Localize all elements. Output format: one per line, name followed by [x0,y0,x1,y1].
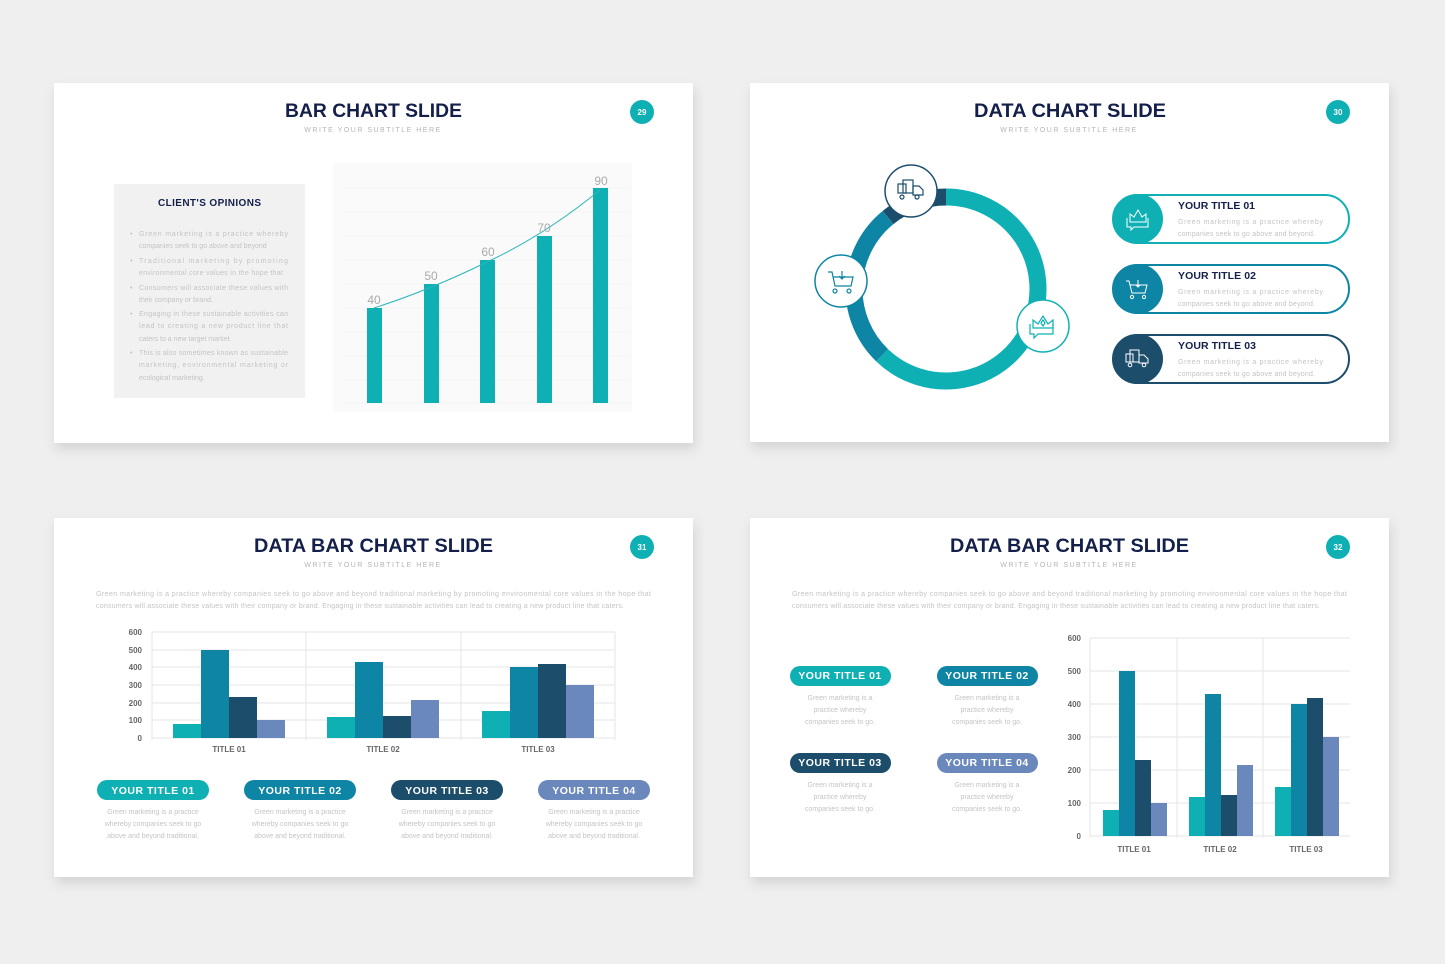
text block: client's opinions: • [130,311,133,318]
item: your title 03 [1113,334,1349,384]
labels grid: companies seek to go. [952,719,1022,726]
labels row: YOUR TITLE 02 [258,785,342,797]
grouped bar chart: TITLE 03 [1289,845,1323,854]
labels grid: Green marketing is a [955,695,1020,702]
text block: client's opinions: Engaging in these sustainable activities can [139,311,288,318]
intro paragraph: consumers will associate these values with their company or brand. Engaging in these sustainable activities can lead to creating a new product line that caters. [96,603,624,610]
text block: client's opinions: lead to creating a new product line that [139,323,288,330]
page number badge: 32 [1334,543,1343,552]
item: your title 02: YOUR TITLE 02 [1178,270,1256,282]
panel: data bar chart slide 31: above and beyond traditional. [401,833,493,840]
item: your title 02: Green marketing is a practice whereby [1178,289,1324,296]
bar chart: growth: 60 [481,245,495,259]
labels grid: companies seek to go. [952,806,1022,813]
panel: data chart slide [750,83,1389,442]
labels row: YOUR TITLE 03 [405,785,489,797]
icon: crown [1017,300,1069,352]
item: your title 01: companies seek to go above and beyond. [1178,231,1315,238]
panel: data bar chart slide 31: Green marketing is a practice [254,809,346,816]
item: your title 01: Green marketing is a practice whereby [1178,219,1324,226]
page number badge [1326,100,1350,124]
panel: data bar chart slide 31: whereby companies seek to go [251,821,348,828]
title: DATA CHART SLIDE [974,101,1166,122]
intro paragraph: Green marketing is a practice whereby companies seek to go above and beyond traditional marketing by promoting environmental core values in the hope that [96,591,651,598]
item: your title 03: companies seek to go above and beyond. [1178,371,1315,378]
grouped bar chart [129,628,615,754]
labels grid: companies seek to go. [805,719,875,726]
text block: client's opinions: environmental core values in the hope that [139,270,283,277]
grouped bar chart: TITLE 01 [1117,845,1151,854]
labels grid: practice whereby [961,707,1014,714]
bar chart: growth: 70 [537,221,551,235]
donut chart [854,197,1038,381]
grouped bar chart: 300 [1068,733,1082,742]
title: DATA BAR CHART SLIDE [254,536,493,557]
labels grid: Green marketing is a [808,695,873,702]
grouped bar chart: 500 [1068,667,1082,676]
bar chart: growth: 50 [424,269,438,283]
item: your title 01: YOUR TITLE 01 [1178,200,1255,212]
text block: client's opinions [114,184,305,398]
labels grid: YOUR TITLE 02 [945,670,1029,682]
labels grid: companies seek to go. [805,806,875,813]
text block: client's opinions: • [130,285,133,292]
panel: data bar chart slide 31: Green marketing is a practice [548,809,640,816]
panel: data bar chart slide 31: above and beyond traditional. [254,833,346,840]
panel: data bar chart slide 32 [750,518,1389,877]
panel: data bar chart slide 31: Green marketing is a practice [107,809,199,816]
page number badge [630,535,654,559]
bar chart: growth: 90 [594,174,608,188]
intro paragraph [792,591,1347,610]
text block: client's opinions: CLIENT'S OPINIONS [158,198,261,209]
text block: client's opinions: ecological marketing. [139,375,205,382]
grouped bar chart: 0 [138,734,143,743]
grouped bar chart: 600 [1068,634,1082,643]
intro paragraph: consumers will associate these values with their company or brand. Engaging in these sustainable activities can lead to creating a new product line that caters. [792,603,1320,610]
item: your title 03: Green marketing is a practice whereby [1178,359,1324,366]
grouped bar chart: 0 [1077,832,1082,841]
grouped bar chart: 200 [1068,766,1082,775]
labels grid: YOUR TITLE 04 [945,757,1029,769]
icon: cart [815,255,867,307]
page number badge: 30 [1334,108,1343,117]
labels grid: practice whereby [961,794,1014,801]
panel: data bar chart slide 31 [54,518,693,877]
title: BAR CHART SLIDE [285,101,462,122]
intro paragraph: Green marketing is a practice whereby companies seek to go above and beyond traditional marketing by promoting environmental core values in the hope that [792,591,1347,598]
text block: client's opinions: • [130,350,133,357]
labels grid: practice whereby [814,707,867,714]
panel: data bar chart slide 31: Green marketing is a practice [401,809,493,816]
text block: client's opinions: their company or brand. [139,297,213,304]
page number badge: 29 [638,108,647,117]
text block: client's opinions: caters to a new target market. [139,336,232,343]
panel: bar chart slide [54,83,693,443]
labels grid [790,666,1038,813]
text block: client's opinions: Consumers will associate these values with [139,285,288,292]
text block: client's opinions: companies seek to go above and beyond [139,243,267,250]
icon: truck [885,165,937,217]
item: your title 02: companies seek to go above and beyond. [1178,301,1315,308]
panel: data bar chart slide 31: above and beyond traditional. [107,833,199,840]
page number badge [630,100,654,124]
grouped bar chart: 100 [129,716,143,725]
text block: client's opinions: • [130,258,133,265]
title: DATA BAR CHART SLIDE [950,536,1189,557]
grouped bar chart: 400 [129,663,143,672]
grouped bar chart: 600 [129,628,143,637]
labels grid: Green marketing is a [808,782,873,789]
labels row [97,780,650,800]
grouped bar chart: TITLE 01 [212,745,246,754]
grouped bar chart: 200 [129,699,143,708]
subtitle: WRITE YOUR SUBTITLE HERE [304,562,442,569]
grouped bar chart: 400 [1068,700,1082,709]
subtitle: WRITE YOUR SUBTITLE HERE [1000,127,1138,134]
grouped bar chart: TITLE 03 [521,745,555,754]
panel: data bar chart slide 31: above and beyond traditional. [548,833,640,840]
grouped bar chart: 100 [1068,799,1082,808]
labels grid: YOUR TITLE 03 [798,757,882,769]
panel: data bar chart slide 31: whereby companies seek to go [398,821,495,828]
text block: client's opinions: Traditional marketing by promoting [139,258,288,265]
labels row: YOUR TITLE 04 [552,785,636,797]
labels row: YOUR TITLE 01 [111,785,195,797]
subtitle: WRITE YOUR SUBTITLE HERE [304,127,442,134]
grouped bar chart [1068,634,1350,854]
bar chart: growth [333,163,632,412]
grouped bar chart: 500 [129,646,143,655]
text block: client's opinions: This is also sometimes known as sustainable [139,350,288,357]
page number badge [1326,535,1350,559]
item: your title 02 [1113,264,1349,314]
panel: data bar chart slide 31: whereby companies seek to go [104,821,201,828]
item: your title 03: YOUR TITLE 03 [1178,340,1256,352]
labels grid: practice whereby [814,794,867,801]
grouped bar chart: 300 [129,681,143,690]
grouped bar chart: TITLE 02 [366,745,400,754]
text block: client's opinions: Green marketing is a practice whereby [139,231,288,238]
bar chart: growth: 40 [367,293,381,307]
intro paragraph [96,591,651,610]
labels grid: Green marketing is a [955,782,1020,789]
item: your title 01 [1113,194,1349,244]
text block: client's opinions: • [130,231,133,238]
panel: data bar chart slide 31: whereby companies seek to go [545,821,642,828]
labels grid: YOUR TITLE 01 [798,670,882,682]
page number badge: 31 [638,543,647,552]
subtitle: WRITE YOUR SUBTITLE HERE [1000,562,1138,569]
text block: client's opinions: marketing, environmental marketing or [139,362,289,369]
grouped bar chart: TITLE 02 [1203,845,1237,854]
